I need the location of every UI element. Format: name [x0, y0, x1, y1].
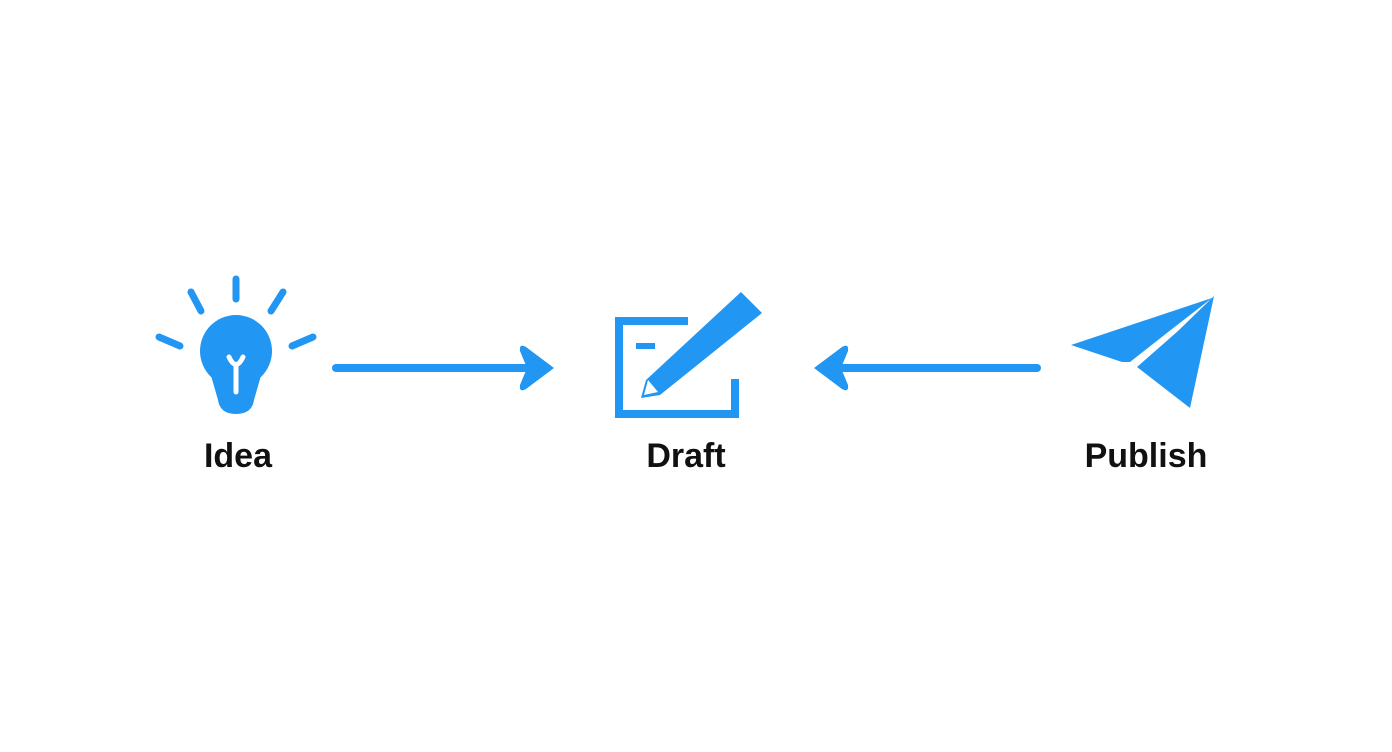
step: draft	[619, 292, 762, 475]
icon: light bulb	[159, 279, 313, 414]
arrow: publish to draft	[814, 346, 1037, 390]
label: Idea: Idea	[204, 437, 273, 475]
icon: paper plane	[1071, 296, 1214, 408]
icon: document with pencil	[619, 292, 762, 414]
label: Draft: Draft	[646, 437, 726, 475]
arrow: idea to draft	[336, 346, 554, 390]
label: Publish: Publish	[1085, 437, 1207, 475]
step: idea	[159, 279, 313, 475]
step: publish	[1071, 296, 1214, 475]
